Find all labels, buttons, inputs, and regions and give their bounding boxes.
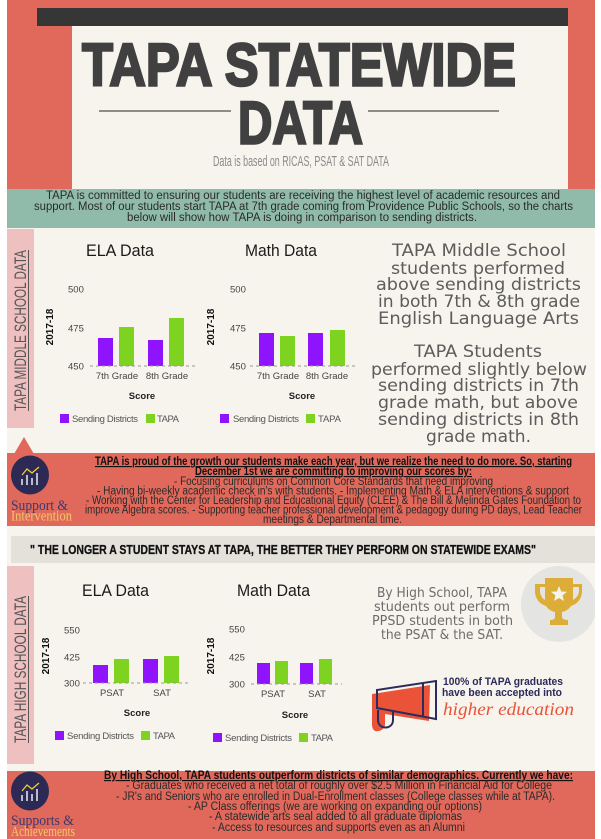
- chart: middle school Math: 8th Grade: [306, 371, 348, 382]
- chart: middle school ELA: ELA Data: [86, 241, 155, 260]
- callout: higher education: [442, 676, 574, 719]
- label: supports and achievements: [11, 813, 75, 839]
- chart: high school ELA: 2017-18: [41, 637, 52, 674]
- icon: megaphone: [372, 681, 436, 731]
- text: improvement commitments: - Focusing curriculums on Common Core Standards that need improving: [174, 476, 493, 488]
- chart: middle school ELA: [45, 241, 195, 425]
- text: current achievements: - Graduates who received a net total of roughly over $2.5 Million in Financial Aid for College: [126, 780, 552, 792]
- chart: middle school Math: TAPA: [318, 414, 342, 425]
- chart: middle school Math: [206, 241, 356, 425]
- chart: middle school ELA: 7th Grade: [96, 371, 138, 382]
- chart: high school Math: 300: [229, 680, 245, 690]
- intro band: below will show how TAPA is doing in comparison to sending districts.: [127, 212, 477, 224]
- sidebar: middle school: TAPA MIDDLE SCHOOL DATA: [11, 250, 30, 411]
- chart: middle school ELA: 450: [68, 362, 84, 372]
- chart: high school ELA: Sending Districts: [67, 731, 134, 742]
- chart: high school ELA: 550: [64, 626, 80, 636]
- text: middle school findings: sending districts in 8th: [378, 410, 579, 429]
- chart: high school ELA: TAPA: [153, 731, 176, 742]
- chart: middle school Math: 475: [230, 324, 246, 334]
- callout: higher education: have been accepted into: [442, 687, 562, 699]
- icon: trophy: [521, 566, 595, 642]
- chart: middle school ELA: Sending Districts: [72, 414, 138, 425]
- text: middle school findings: in both 7th & 8th grade: [378, 292, 580, 311]
- chart: middle school ELA: Score: [129, 391, 155, 402]
- text: improvement commitments: meetings & Departmental time.: [263, 514, 402, 526]
- text: middle school findings: English Language Arts: [378, 309, 579, 328]
- text: middle school findings: TAPA Students: [413, 342, 542, 361]
- chart: high school Math: TAPA: [311, 733, 334, 744]
- label: support and intervention: [11, 498, 73, 524]
- chart: high school ELA: PSAT: [100, 688, 124, 699]
- chart: high school Math: Math Data: [237, 581, 310, 600]
- text: high school findings: students out perform: [374, 600, 510, 615]
- chart: high school Math: 425: [229, 652, 245, 664]
- label: supports and achievements: Supports &: [11, 813, 75, 829]
- chart: middle school Math: 7th Grade: [257, 371, 299, 382]
- dark top bar: [37, 8, 568, 26]
- chart: middle school Math: 450: [230, 362, 246, 372]
- text: high school findings: By High School, TAPA: [377, 586, 507, 601]
- chart: middle school ELA: TAPA: [157, 414, 180, 425]
- text: middle school findings: above sending districts: [376, 275, 581, 294]
- text: high school findings: the PSAT & the SAT.: [381, 628, 503, 643]
- intro band: TAPA is committed to ensuring our students are receiving the highest level of academic resources and: [46, 190, 560, 202]
- text: current achievements: - JR's and Seniors who are enrolled in Dual-Enrollment classes (College classes while at TAPA).: [116, 791, 555, 803]
- icon: growth chart: [11, 456, 49, 494]
- text: middle school findings: [371, 241, 587, 446]
- chart: high school ELA: ELA Data: [82, 581, 150, 600]
- chart: high school ELA: [41, 581, 191, 742]
- header panel: [7, 0, 595, 200]
- text: improvement commitments: [85, 456, 582, 526]
- label: support and intervention: Support &: [11, 498, 69, 514]
- arrow pointer: [14, 437, 34, 454]
- title: DATA: [238, 90, 363, 156]
- title card: [72, 26, 568, 200]
- text: middle school findings: grade math.: [426, 427, 531, 446]
- callout: higher education: 100% of TAPA graduates: [443, 676, 563, 688]
- title rules: [99, 110, 499, 112]
- text: high school findings: PPSD students in both: [372, 614, 513, 629]
- chart: middle school Math: 500: [230, 284, 246, 296]
- text: current achievements: [104, 770, 573, 834]
- text: improvement commitments: December 1st we are committing to improving our scores by:: [195, 466, 472, 478]
- intro band: support. Most of our students start TAPA at 7th grade coming from Providence Public Schools, so the charts: [34, 201, 573, 213]
- subtitle: Data is based on RICAS, PSAT & SAT DATA: [213, 153, 389, 170]
- chart: high school Math: Score: [282, 710, 308, 721]
- text: current achievements: - Access to resources and supports even as an Alumni: [212, 822, 465, 834]
- chart: high school ELA: SAT: [153, 688, 171, 699]
- sidebar: middle school: [7, 229, 34, 428]
- sidebar: high school: [7, 566, 34, 764]
- chart: middle school ELA: 2017-18: [45, 308, 56, 345]
- chart: middle school Math: Math Data: [245, 241, 317, 260]
- quote banner: [11, 536, 595, 563]
- title: [82, 32, 516, 156]
- callout: higher education: higher education: [443, 699, 574, 719]
- panel: support and intervention: [7, 453, 595, 526]
- text: middle school findings: performed slightly below: [371, 360, 587, 379]
- intro band: [7, 189, 595, 228]
- label: support and intervention: Intervention: [11, 508, 73, 524]
- chart: high school ELA: Score: [124, 708, 150, 719]
- chart: high school Math: PSAT: [261, 689, 285, 700]
- chart: high school ELA: 300: [64, 678, 80, 690]
- sidebar: high school: TAPA HIGH SCHOOL DATA: [11, 596, 30, 743]
- panel: supports and achievements: [7, 770, 595, 839]
- chart: high school ELA: 425: [64, 652, 80, 664]
- text: high school findings: [372, 586, 513, 643]
- text: middle school findings: sending districts in 7th: [378, 376, 579, 395]
- chart: high school Math: 2017-18: [206, 637, 217, 674]
- chart: middle school ELA: 500: [68, 284, 84, 296]
- chart: high school Math: Sending Districts: [225, 733, 292, 744]
- chart: middle school Math: 2017-18: [206, 308, 217, 345]
- chart: high school Math: [206, 581, 342, 744]
- chart: middle school Math: Score: [289, 391, 315, 402]
- chart: middle school ELA: 8th Grade: [146, 371, 188, 382]
- text: current achievements: - AP Class offerings (we are working on expanding our options): [188, 801, 482, 813]
- icon: growth chart: [11, 772, 49, 810]
- chart: high school Math: 550: [229, 624, 245, 636]
- text: middle school findings: grade math, but above: [378, 393, 578, 412]
- text: middle school findings: students performed: [391, 259, 565, 278]
- chart: middle school Math: Sending Districts: [233, 414, 299, 425]
- chart: high school Math: SAT: [308, 689, 326, 700]
- text: middle school findings: TAPA Middle School: [391, 241, 566, 260]
- title: TAPA STATEWIDE: [82, 32, 516, 98]
- chart: middle school ELA: 475: [68, 324, 84, 334]
- text: current achievements: - A statewide arts seal added to all graduate diplomas: [209, 811, 462, 823]
